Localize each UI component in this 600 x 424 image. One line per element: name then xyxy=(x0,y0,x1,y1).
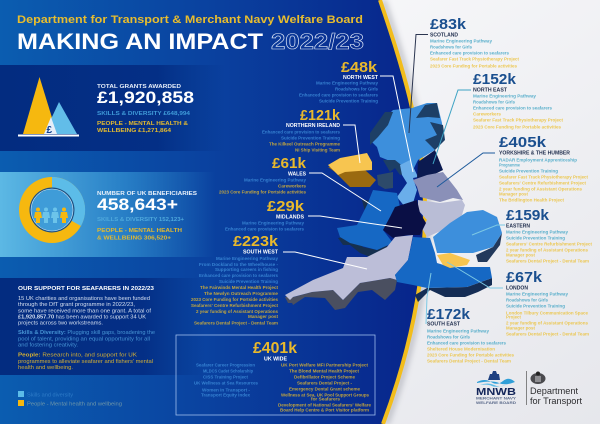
icon: people xyxy=(34,208,68,223)
legend: People - Mental health and wellbeing xyxy=(27,402,122,408)
panel: total grants xyxy=(0,65,225,151)
projects: From Dockland to the Wheelhouse - xyxy=(199,262,279,267)
map: Wales xyxy=(337,190,400,258)
support people: programmes to alleviate seafarer and fishers' mental xyxy=(18,359,153,365)
projects: Project xyxy=(506,314,522,320)
projects: Careworkers xyxy=(473,112,502,116)
logo strapline xyxy=(476,396,517,405)
projects: 2023 Core Funding for Portside activities xyxy=(219,190,307,194)
people projects: Defibrillator Project Scheme xyxy=(294,374,356,380)
projects xyxy=(427,328,515,364)
projects xyxy=(473,94,564,130)
leader: North West xyxy=(380,76,413,172)
projects: Supporting careers in fishing xyxy=(215,267,278,272)
title header xyxy=(17,14,364,54)
projects: Programme xyxy=(499,162,521,168)
amount: £172k xyxy=(427,306,471,323)
skills projects: Transport Equity Index xyxy=(201,392,251,398)
projects: 2023 Core Funding for Portable activities xyxy=(473,124,562,130)
projects: Suicide Prevention Training xyxy=(281,136,340,140)
map: island xyxy=(377,172,393,189)
people projects xyxy=(278,362,372,412)
support skills and diversity: Skills & Diversity: Plugging skill gaps, broadening the xyxy=(18,330,155,336)
amount: £159k xyxy=(506,207,550,224)
map: London xyxy=(437,253,470,268)
support intro: 15 UK charities and organisations have been funded xyxy=(18,296,150,302)
department name: Department xyxy=(530,386,578,397)
logo strapline: MERCHANT NAVY xyxy=(476,396,517,400)
map: North East xyxy=(417,150,443,178)
leader: Yorkshire xyxy=(437,153,495,187)
heading: organisations: Department for Transport & Merchant Navy Welfare Board xyxy=(17,14,363,26)
beneficiaries people: & WELLBEING 306,520+ xyxy=(97,236,172,242)
amount: £67k xyxy=(506,269,543,286)
projects: Suicide Prevention Training xyxy=(506,236,565,240)
projects: Sheltered House Modernisation xyxy=(427,346,495,352)
projects: Enhanced care provision to seafarers xyxy=(430,50,510,56)
projects xyxy=(262,130,341,152)
amount: £121k xyxy=(300,107,341,124)
projects: London Tilbury Communication Space xyxy=(506,310,589,316)
support skills and diversity: and fostering creativity. xyxy=(18,342,78,348)
projects: NI Ship Visiting Team xyxy=(295,148,340,152)
projects: Suicide Prevention Training xyxy=(219,279,278,284)
support intro: projects across two workstreams. xyxy=(18,320,103,326)
projects: 2023 Core Funding for Portable activities xyxy=(430,64,518,68)
map: North West xyxy=(397,160,418,207)
title: MAKING AN IMPACT xyxy=(17,29,264,54)
name: SOUTH WEST xyxy=(243,250,278,256)
people projects: Wellness at Sea, UK Pool Support Groups xyxy=(281,392,370,398)
region: London xyxy=(506,269,589,336)
projects: Suicide Prevention Training xyxy=(506,304,565,308)
beneficiaries total: 458,643+ xyxy=(97,195,178,214)
support skills and diversity xyxy=(18,330,155,348)
support skills and diversity: pool of talent, providing an equal opportunity for all xyxy=(18,336,150,342)
name: SOUTH EAST xyxy=(427,322,460,328)
map: East Midlands xyxy=(418,200,465,237)
department name xyxy=(530,386,582,407)
amount: £152k xyxy=(473,71,517,88)
logo: MNWB xyxy=(476,371,517,405)
leader: North East xyxy=(433,90,471,164)
projects xyxy=(219,178,307,194)
projects: The Newlyn Outreach Programme xyxy=(204,291,279,296)
support people: People: Research into, and support for UK xyxy=(18,352,138,358)
icon: ship and waves xyxy=(477,371,515,387)
name: SCOTLAND xyxy=(430,32,458,38)
people projects: for Seafarers xyxy=(311,396,341,402)
projects: Suicide Prevention Training xyxy=(319,98,378,104)
skills projects xyxy=(194,362,259,398)
icon: royal crest xyxy=(530,372,546,384)
name: UK WIDE xyxy=(264,356,288,362)
projects: Seafarers' Centre Refurbishment Project xyxy=(191,303,279,308)
skills projects: Women in Transport - xyxy=(202,388,251,392)
amount: £29k xyxy=(267,198,305,215)
support intro: £1,920,857.70 has been awarded to support 34 UK xyxy=(18,314,146,320)
leader: South East xyxy=(426,273,431,324)
map: Scotland xyxy=(370,103,445,175)
amount: £83k xyxy=(430,16,467,33)
amount: £48k xyxy=(341,59,378,76)
projects: Enhanced care provision to seafarers xyxy=(225,226,305,232)
map of UK regions xyxy=(285,103,502,310)
projects xyxy=(430,38,520,68)
projects: Enhanced care provision to seafarers xyxy=(473,106,553,110)
leader: South West xyxy=(283,252,367,269)
projects xyxy=(191,256,279,326)
chart: beneficiaries donut xyxy=(19,177,85,243)
skills projects: Seafarer Career Progression xyxy=(196,362,255,368)
leader: Eastern xyxy=(472,225,505,235)
projects: The Kilkeel Outreach Programme xyxy=(269,142,341,146)
projects: Manager post xyxy=(499,192,529,196)
projects: Enhanced care provision to seafarers xyxy=(427,340,507,346)
projects: Roadshows for Girls xyxy=(427,334,471,340)
projects: Seafarers Dental Project - Dental Team xyxy=(506,332,589,336)
region: Northern Ireland xyxy=(262,107,341,152)
name: EASTERN xyxy=(506,224,530,230)
amount: £61k xyxy=(272,155,307,172)
people projects: UK Port Welfare MFI Partnership Project xyxy=(281,362,369,368)
support people xyxy=(18,352,153,371)
projects xyxy=(225,220,305,232)
projects: Enhanced care provision to seafarers xyxy=(199,273,279,278)
projects: The Bridlington Health Project xyxy=(499,198,565,202)
name: NORTHERN IRELAND xyxy=(286,123,340,129)
projects: Marine Engineering Pathway xyxy=(216,256,279,261)
logo strapline: WELFARE BOARD xyxy=(476,401,516,405)
projects: Marine Engineering Pathway xyxy=(430,38,493,44)
projects: 2 year funding of Assistant Operations xyxy=(506,248,589,252)
projects: Roadshows for Girls xyxy=(430,44,473,50)
projects: Marine Engineering Pathway xyxy=(506,292,569,296)
projects: Enhanced care provision to seafarers xyxy=(262,130,341,134)
projects: Roadshows for Girls xyxy=(335,86,379,92)
icon: grant mountains: £ xyxy=(46,125,52,136)
leader: Scotland xyxy=(409,34,428,133)
people projects: Seafarers Dental Project - xyxy=(297,380,353,386)
name: MIDLANDS xyxy=(276,214,305,220)
projects: Seafarer Fast Track Physiotherapy Project xyxy=(430,56,520,62)
logo wordmark: MNWB xyxy=(476,387,516,398)
grants skills and diversity: SKILLS & DIVERSITY £648,994 xyxy=(97,111,190,117)
projects: Suicide Prevention Training xyxy=(499,168,558,174)
projects: 2023 Core Funding for Portside activities xyxy=(191,297,279,302)
panel: UK wide xyxy=(176,335,375,415)
region: Eastern xyxy=(506,207,593,264)
projects: Enhanced care provision to seafarers xyxy=(299,92,379,98)
people projects: Emergency Dental Grant scheme xyxy=(289,386,361,392)
projects: Manager post xyxy=(248,314,279,319)
projects: 2 year funding of Assistant Operations xyxy=(506,320,589,326)
icon: grant mountains xyxy=(18,77,79,136)
map: Yorkshire and the Humber xyxy=(413,172,463,202)
department name: for Transport xyxy=(530,396,582,407)
projects: Seafarers Dental Project - Dental Team xyxy=(506,258,589,264)
leader lines xyxy=(283,34,505,324)
support intro: some have received more than one grant. A total of xyxy=(18,308,152,314)
projects: Manager post xyxy=(506,326,536,330)
projects: 2023 Core Funding for Portable activities xyxy=(427,352,515,358)
title year outline: 2022/23 xyxy=(271,29,364,54)
leader: Midlands xyxy=(308,216,402,228)
projects: Seafarers Dental Project - Dental Team xyxy=(427,358,511,364)
name: NORTH EAST xyxy=(473,88,507,94)
grants total: £1,920,858 xyxy=(97,88,194,107)
name: YORKSHIRE & THE HUMBER xyxy=(499,150,570,156)
grants people xyxy=(97,121,188,134)
amount: £405k xyxy=(499,134,547,151)
support people: health and wellbeing. xyxy=(18,365,73,371)
projects: Marine Engineering Pathway xyxy=(316,80,379,86)
projects: Marine Engineering Pathway xyxy=(427,328,490,334)
projects: Marine Engineering Pathway xyxy=(242,220,305,226)
support intro xyxy=(18,296,152,326)
beneficiaries people: PEOPLE - MENTAL HEALTH xyxy=(97,228,182,234)
beneficiaries label: NUMBER OF UK BENEFICIARIES xyxy=(97,191,197,197)
name: NORTH WEST xyxy=(343,75,378,81)
projects: Manager post xyxy=(506,252,536,258)
grants people: PEOPLE - MENTAL HEALTH & xyxy=(97,121,188,127)
projects: Roadshows for Girls xyxy=(473,100,516,104)
projects: Marine Engineering Pathway xyxy=(506,230,569,234)
projects: Careworkers xyxy=(278,184,307,188)
people projects: Development of National Seafarers' Welfare xyxy=(278,402,372,408)
logo: Department for Transport xyxy=(526,371,582,407)
projects: 2 year funding of Assistant Operations xyxy=(499,186,583,192)
region: South West xyxy=(191,233,279,326)
region: South East xyxy=(427,306,515,364)
map: South West xyxy=(285,235,413,310)
skills projects: CISS Training Project xyxy=(203,374,249,380)
skills projects: UK Wellness at Sea Resources xyxy=(194,380,259,386)
name: LONDON xyxy=(506,286,528,292)
projects xyxy=(499,158,589,202)
projects xyxy=(506,292,589,336)
map: Eastern xyxy=(433,210,502,262)
projects: Seafarers' Centre Refurbishment Project xyxy=(506,242,593,246)
projects: Seafarer Fast Track Physiotherapy Project xyxy=(499,174,589,180)
map: Midlands xyxy=(383,200,426,238)
legend: Skills and diversity xyxy=(27,392,73,398)
projects: RADAR Employment Apprenticeship xyxy=(499,158,577,162)
projects: 2 year funding of Assistant Operations xyxy=(196,309,279,314)
map: Northern Ireland xyxy=(328,153,376,187)
people projects: The Blond Mental Health Project xyxy=(289,368,360,374)
projects: Roadshows for Girls xyxy=(506,298,549,302)
projects: Seafarers' Centre Refurbishment Project xyxy=(499,180,587,186)
region: North East xyxy=(473,71,564,130)
projects: The Fairwinds Mental Health Project xyxy=(200,285,279,290)
beneficiaries people xyxy=(97,228,182,242)
beneficiaries skills: SKILLS & DIVERSITY 152,123+ xyxy=(97,217,184,223)
leader: Wales xyxy=(309,173,381,211)
region: Yorkshire and the Humber xyxy=(499,134,589,202)
panel: beneficiaries xyxy=(0,172,215,257)
projects: Seafarer Fast Track Physiotherapy Project xyxy=(473,118,564,122)
skills projects: MLDCS Cadet Scholarship xyxy=(203,368,253,374)
grants label: TOTAL GRANTS AWARDED xyxy=(97,84,181,90)
region: Wales xyxy=(219,155,307,194)
projects xyxy=(299,80,379,104)
people projects: Board Help Centre & Port Visitor platform xyxy=(280,408,369,412)
curved blue background panel xyxy=(0,0,425,424)
projects: Marine Engineering Pathway xyxy=(244,178,307,182)
panel: our support for seafarers xyxy=(0,278,205,375)
amount: £223k xyxy=(233,233,279,250)
map: South East xyxy=(395,237,492,302)
leader: London xyxy=(447,262,503,288)
region: North West xyxy=(299,59,379,104)
projects: Seafarers Dental Project - Dental Team xyxy=(194,320,278,326)
support intro: through the DfT grant programme in 2022/23, xyxy=(18,302,135,308)
grants people: WELLBEING £1,271,864 xyxy=(97,128,171,134)
legend xyxy=(18,391,122,408)
amount: £401k xyxy=(253,340,297,357)
projects: Marine Engineering Pathway xyxy=(473,94,537,98)
region: Midlands xyxy=(225,198,305,232)
region: Scotland xyxy=(430,16,520,68)
name: WALES xyxy=(288,172,307,178)
leader: Northern Ireland xyxy=(343,125,360,163)
projects xyxy=(506,230,593,264)
support heading: OUR SUPPORT FOR SEAFARERS IN 2022/23 xyxy=(18,286,155,292)
